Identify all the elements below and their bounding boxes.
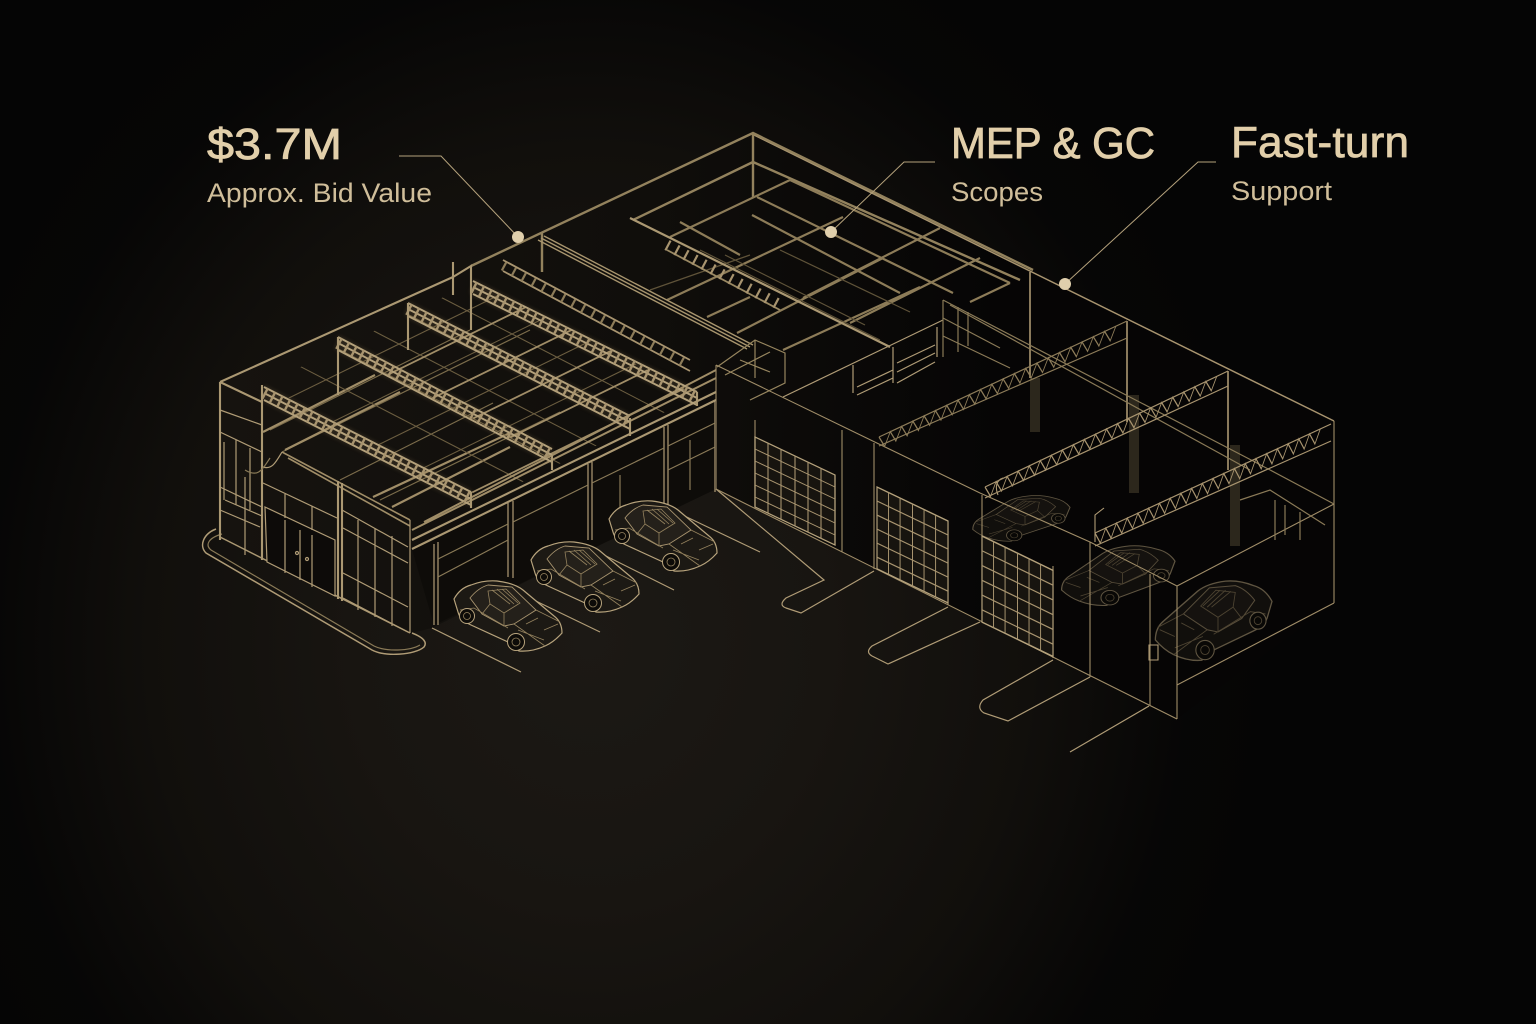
support heading: Fast-turn [1231,118,1409,167]
roof cross beams [264,281,698,500]
roof truss 1 [264,387,471,505]
bay pillars [1035,378,1235,546]
roof truss 3 [408,303,630,429]
front entrance [220,477,410,633]
leader line [1065,162,1216,284]
bay posts [1030,272,1228,470]
bay wall lines [716,300,1334,719]
car 3 [609,501,717,571]
truss end posts [262,303,697,508]
roof outer frame [220,262,471,633]
ghost cars inside the bay [973,496,1272,660]
truss: middle [985,371,1228,499]
right service bay [716,134,1334,719]
leader line [831,162,935,232]
left showroom [220,260,716,633]
rear roof framing [471,133,1033,400]
left storefront [220,477,262,555]
garage door 1 [755,437,835,545]
right storefront [342,510,410,633]
truss: rear [879,321,1127,449]
scopes label: Scopes [951,177,1043,207]
callout: scopes [825,119,1155,238]
leader line [399,156,518,237]
parapet [471,133,1033,280]
truss: front [1095,424,1331,546]
canopy fascia [412,370,716,549]
support label: Support [1231,176,1333,206]
stat label: Approx. Bid Value [207,178,432,208]
end frame [717,340,785,400]
left end framing [220,410,270,516]
garage door 2 [877,487,948,603]
callout: support [1059,118,1409,290]
partition window [783,300,1010,397]
roof truss 5 [503,260,690,371]
carport posts and back wall [434,400,715,625]
callout: bid value [207,120,524,243]
scopes heading: MEP & GC [951,119,1155,168]
faint service runs [650,250,910,340]
stat heading: $3.7M [207,120,342,169]
roof truss 2 [338,337,552,462]
pavement markings [203,489,1149,752]
building footprint [220,134,1334,719]
building illustration [203,133,1334,752]
roof truss 4 [473,281,697,405]
lower roof floor grid [263,330,560,526]
main posts [262,480,342,601]
carport shadow [412,400,716,625]
garage door 3 [982,536,1053,656]
cross beams [667,180,1010,350]
rear back edge [752,134,1334,421]
entry doors [263,483,337,596]
rear truss ladder [630,218,890,347]
car 2 [531,542,639,612]
heavy triple beam [538,236,753,349]
car 1 [454,581,562,651]
